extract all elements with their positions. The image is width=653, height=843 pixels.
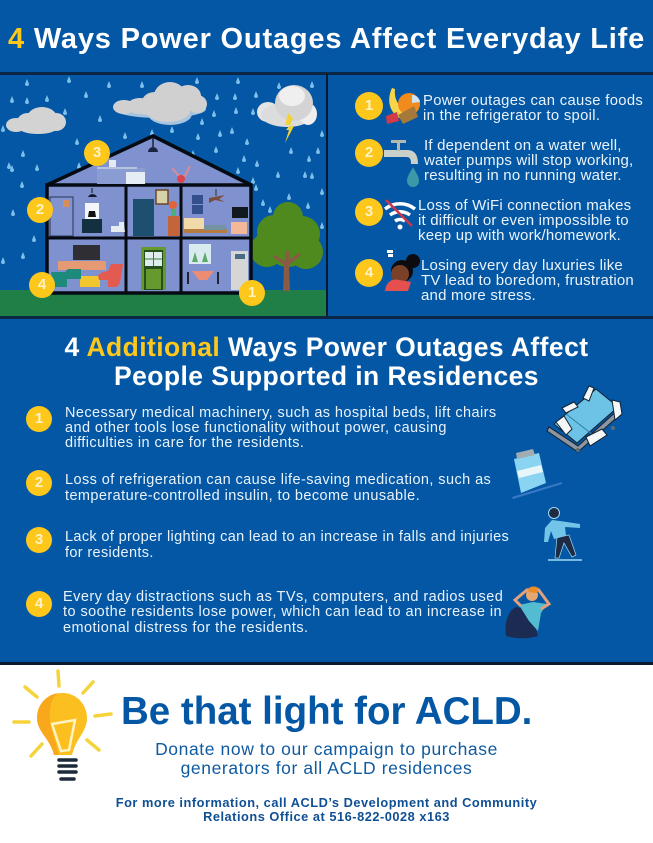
item 1 badge: 1 [35,410,43,427]
icon: distressed person [506,586,552,638]
item 1 text: and other tools lose functionality without power, causing [65,420,447,436]
item 4 badge: 4 [365,264,373,281]
item 1 text: Power outages can cause foods [423,93,643,109]
icon: light bulb [12,669,113,781]
attic desk and exercise bike [97,168,145,184]
item 3 text: Loss of WiFi connection makes [418,196,631,214]
heading: additional ways: 4 Additional Ways Power Outages Affect [64,332,588,362]
item 3 badge: 3 [35,531,43,548]
contact information [116,795,537,824]
item 1 text [423,93,643,124]
item 2 text [424,136,633,184]
item 3 text [418,196,631,244]
donation text: Donate now to our campaign to purchase [155,738,498,758]
bedroom [192,195,203,204]
item 2 text: If dependent on a water well, [424,136,622,154]
heading: additional ways [64,332,588,391]
icon: bored person [385,250,420,291]
item 2 text: Loss of refrigeration can cause life-saving medication, such as [65,472,491,488]
item 3 text [65,528,509,560]
tree [250,202,323,291]
item 4 badge [355,259,383,287]
item 3 badge: 3 [365,203,373,220]
item 1 badge [355,92,383,120]
item 4 text [63,588,503,636]
panel: residence effects [26,385,622,638]
item 2 text: water pumps will stop working, [424,152,633,169]
item 4 text: and more stress. [421,287,536,304]
item 3 badge [26,527,52,553]
item 4 text: to soothe residents lose power, which can lead to an increase in [63,604,502,620]
living room [73,245,100,260]
item 3 text: for residents. [65,544,154,560]
item 2 badge [26,470,52,496]
number badge 2 on house [27,197,53,223]
ground [0,290,327,316]
green door [141,247,166,290]
heading: be that light: Be that light for ACLD. [121,690,532,733]
item 1 badge: 1 [365,97,373,114]
item 1 badge [26,406,52,432]
item 3 badge [355,198,383,226]
panel: house illustration [0,76,326,316]
item 2 text: temperature-controlled insulin, to become unusable. [65,488,420,504]
number badge 4 on house [29,272,55,298]
item 4 text: Losing every day luxuries like [421,256,623,274]
hallway [133,199,154,236]
kitchen [189,244,211,264]
item 1 text [65,404,497,450]
item 3 text: keep up with work/homework. [418,227,621,244]
storm cloud with lightning [257,85,317,143]
item 2 text: resulting in no running water. [424,167,622,184]
item 1 text: Necessary medical machinery, such as hospital beds, lift chairs [65,404,497,420]
item 3 text: Lack of proper lighting can lead to an increase in falls and injuries [65,528,509,544]
contact information: For more information, call ACLD’s Development and Community [116,795,537,810]
number badge 1 on house: 1 [248,284,256,301]
number badge 3 on house: 3 [93,144,101,161]
donation text: generators for all ACLD residences [181,758,472,778]
number badge 3 on house [84,140,110,166]
item 2 badge: 2 [35,474,43,491]
number badge 4 on house: 4 [38,276,46,293]
donation text [155,738,498,778]
item 4 badge [26,591,52,617]
number badge 2 on house: 2 [36,201,44,218]
cloud left [6,107,66,134]
rain [1,76,324,264]
blue background panel [0,0,653,663]
item 2 text [65,472,491,504]
item 4 text: Every day distractions such as TVs, computers, and radios used [63,588,503,604]
item 3 text: it difficult or even impossible to [418,212,629,229]
icon: water tap [384,140,419,187]
icon: falling person [544,507,582,561]
item 4 text: emotional distress for the residents. [63,620,309,636]
item 1 text: in the refrigerator to spoil. [423,108,600,124]
bathroom [50,197,73,236]
item 2 badge: 2 [365,144,373,161]
item 4 badge: 4 [35,595,43,612]
item 4 text: TV lead to boredom, frustration [421,272,634,289]
icon: medication bottle [512,449,562,499]
panel: everyday effects [355,88,643,304]
icon: spoiled food [386,88,420,124]
divider above footer [0,662,653,664]
heading: additional ways: People Supported in Residences [114,361,539,391]
item 2 badge [355,139,383,167]
number badge 1 on house [239,280,265,306]
title: 4 Ways Power Outages Affect Everyday Life [8,23,645,55]
icon: hospital bed [546,385,622,452]
contact information: Relations Office at 516-822-0028 x163 [203,809,450,824]
item 1 text: difficulties in care for the residents. [65,434,304,450]
cloud middle [113,82,207,125]
divider lines [0,72,653,75]
house [47,136,251,293]
item 4 text [421,256,634,304]
icon: no wifi [384,199,416,230]
